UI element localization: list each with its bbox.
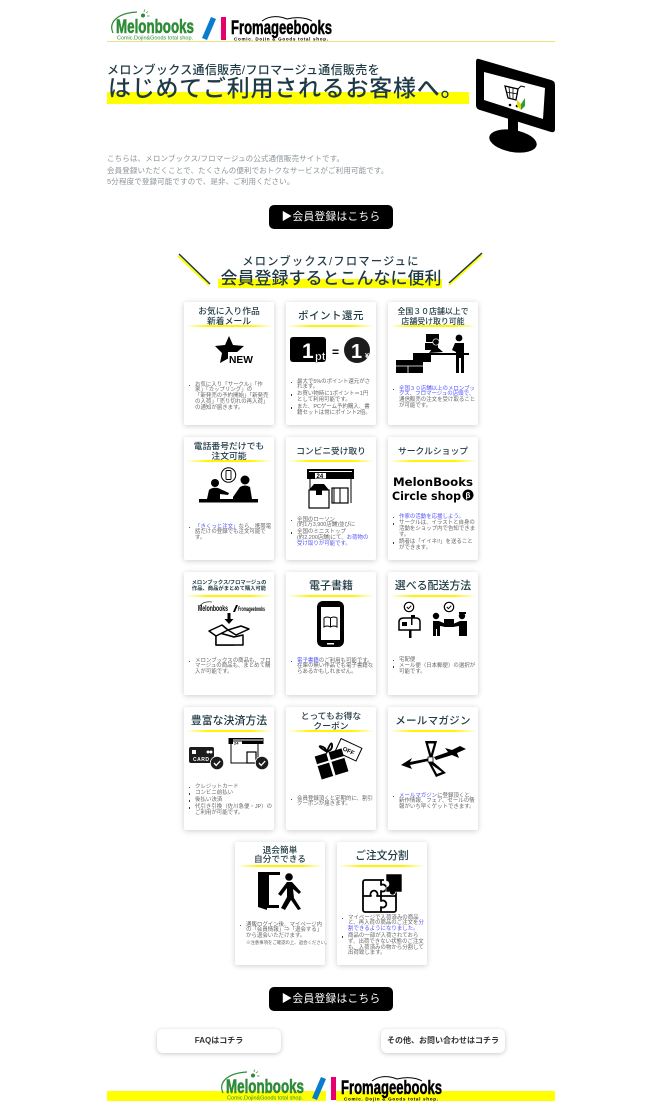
card title	[301, 711, 361, 730]
card text: また、PCゲーム予約購入、書	[297, 404, 370, 410]
main title: はじめてご利用されるお客様へ。	[108, 75, 464, 101]
card text: 可能です。	[399, 669, 426, 675]
icon: mailbox and courier	[398, 602, 467, 638]
card text: 読者は「イイネ!!」を送ること	[399, 539, 473, 545]
card text: (約1万3,900店舗)並びに	[297, 522, 355, 528]
card title	[254, 845, 306, 864]
card text: 代引き引換（佐川急便・JP）の	[195, 804, 272, 810]
icon: bundle box: Melonbooks	[198, 603, 228, 613]
link button: contact: その他、お問い合わせはコチラ	[387, 1036, 499, 1045]
icon: 1pt equals 1 yen: 1	[302, 340, 314, 363]
card text: 作家の活動を応援しよう。	[399, 514, 464, 520]
card text: 通販ログイン後、マイページ内	[246, 922, 322, 928]
card: easy withdrawal	[235, 842, 325, 965]
card title: 作品、商品がまとめて購入可能	[192, 586, 266, 592]
heading line 1: メロンブックス/フロマージュに	[242, 256, 420, 268]
card text	[342, 914, 424, 956]
card text: メール便（日本郵便）の選択が	[399, 663, 475, 669]
logo: Fromageebooks: Fromageebooks	[231, 18, 332, 39]
register button top	[269, 205, 393, 229]
card title: サークルショップ	[398, 446, 468, 456]
icon: convenience store	[307, 469, 354, 509]
icon: puzzle	[362, 874, 402, 913]
card: mail magazine	[388, 707, 478, 830]
card: ebooks	[286, 572, 376, 695]
card text: す。	[399, 532, 409, 538]
card title: メールマガジン	[395, 715, 471, 727]
register button bottom: ▶会員登録はこちら	[282, 993, 380, 1005]
card text: お買い物時に1ポイント＝1円	[297, 391, 368, 397]
card text: 全国のミニストップ	[297, 529, 346, 535]
card title: 電話番号だけでも	[194, 441, 264, 451]
card text: メロンブックスの商品も、フロ	[195, 658, 271, 664]
intro text: 5分程度で登録可能ですので、是非、ご利用ください。	[107, 177, 294, 186]
card: phone order	[184, 437, 274, 560]
card text: 報がいち早くゲットできます。	[399, 804, 475, 810]
card text: 家」「カップリング」の	[195, 387, 252, 393]
card text	[291, 795, 373, 807]
card text: 電子書籍のご利用も可能です。	[297, 658, 373, 664]
footer logos	[217, 1068, 447, 1102]
heading line 2: 会員登録するとこんなに便利	[220, 269, 442, 288]
card text: 籍セットは常にポイント2倍。	[297, 410, 371, 416]
link button: FAQ	[157, 1029, 281, 1053]
card text: (約2,200店舗)にて、お荷物の	[297, 535, 368, 541]
footer logo: Melonbooks: Comic.Dojin&Goods total shop.	[227, 1096, 303, 1102]
logo: Fromageebooks	[231, 17, 332, 42]
card text: お気に入り「サークル」「作	[195, 382, 263, 388]
card text: マイページで入荷済みの商品	[348, 914, 419, 920]
card text: れます。	[297, 384, 318, 390]
footer logo: Fromageebooks: Fromageebooks	[341, 1078, 442, 1099]
card text: メールマガジンに登録頂くと、	[399, 792, 475, 798]
card title: 注文可能	[211, 450, 247, 460]
logo: Melonbooks: Comic.Dojin&Goods total shop.	[117, 36, 193, 42]
card title	[194, 441, 264, 460]
icon: bundle box: Fromageebooks	[238, 606, 265, 613]
card text: の「会員情報」⇒「退会する」	[246, 927, 322, 933]
card title: 新着メール	[207, 316, 251, 326]
card: favorites mail	[184, 302, 274, 425]
icon: 1pt equals 1 yen: 1	[351, 341, 362, 363]
card title: コンビニ受け取り	[296, 446, 366, 456]
card text: 最大で5%のポイント還元がさ	[297, 378, 370, 384]
card text: が可能です。	[399, 403, 431, 409]
card title: 店舗受け取り可能	[401, 316, 465, 326]
card text: 話だけの登録でも注文可能で	[195, 529, 266, 535]
icon: phone order	[199, 467, 258, 502]
card text	[291, 656, 373, 675]
icon: card and store: CARD	[193, 757, 209, 763]
card text: 割できるようになりました。	[348, 926, 419, 932]
card text	[393, 656, 475, 675]
card text: ず、出荷できない状態のご注文	[348, 939, 424, 945]
footer band	[107, 1091, 555, 1101]
icon: circle shop wordmark: MelonBooks	[393, 475, 473, 489]
card text: 活動をショップ内で告知できま	[399, 526, 475, 532]
icon: monitor with cart	[476, 58, 555, 153]
footer logo: Fromageebooks: Comic. Dojin & Goods total shop.	[344, 1096, 438, 1102]
card text: 出荷致します。	[348, 950, 386, 956]
footer logo: Melonbooks: Melonbooks	[226, 1077, 304, 1098]
card text: ご利用が可能です。	[195, 810, 243, 816]
card title: 電子書籍	[309, 580, 353, 592]
card text	[393, 513, 475, 551]
card text: 後払い決済	[195, 797, 222, 803]
card title: 選べる配送方法	[395, 580, 471, 592]
card: circle shop	[388, 437, 478, 560]
icon: weather vane	[401, 741, 466, 777]
icon: circle shop wordmark: β	[466, 491, 471, 500]
card text: らあるかもしれません。	[297, 669, 357, 675]
card text: 全国３０店舗以上のメロンブッ	[399, 386, 475, 392]
icon: door and walking person	[258, 872, 301, 910]
card title: メロンブックス/フロマージュの	[192, 580, 266, 586]
card: split orders	[337, 842, 427, 965]
card text: 在庫の無い作品でも電子書籍な	[297, 663, 373, 669]
logo: Fromageebooks: Comic. Dojin & Goods total shop.	[234, 36, 328, 42]
card: points	[286, 302, 376, 425]
card text: 「きくっと注文」なら、携帯電	[195, 524, 271, 530]
card title: ポイント還元	[298, 310, 364, 322]
card title: とってもお得な	[301, 711, 361, 721]
intro text: 会員登録いただくことで、たくさんの便利でおトクなサービスがご利用可能です。	[107, 166, 388, 175]
card text	[189, 523, 271, 541]
card text: マージュの商品も、まとめて購	[195, 663, 270, 669]
icon: bundle box	[198, 602, 265, 646]
card text: 商品の一部が入荷されておら	[348, 933, 418, 939]
register button bottom	[269, 987, 393, 1011]
card text	[189, 381, 268, 411]
card: delivery methods	[388, 572, 478, 695]
icon: card and store: 24	[234, 740, 239, 746]
card text: 会員登録頂くと定期的に、割引	[297, 796, 373, 802]
register button top: ▶会員登録はこちら	[282, 211, 380, 223]
card title: 全国３０店舗以上で	[397, 307, 469, 316]
card text: コンビニ前払い	[195, 790, 233, 796]
logo: Melonbooks	[112, 10, 194, 42]
icon: star new: NEW	[229, 354, 253, 366]
card text: クーポンが届きます。	[297, 801, 351, 807]
card text: クス、フロマージュの店頭で、	[399, 391, 474, 397]
icon: 1pt equals 1 yen	[290, 337, 370, 363]
card text	[393, 384, 475, 409]
section heading	[177, 252, 483, 288]
card text: 入が可能です。	[195, 669, 233, 675]
card text	[291, 516, 368, 547]
card text: ができます。	[399, 545, 431, 551]
icon: gift and coupon	[314, 738, 363, 780]
icon: card and store	[189, 738, 268, 770]
card text	[393, 792, 475, 810]
card: bundled purchase	[184, 572, 274, 695]
card: convenience store pickup	[286, 437, 376, 560]
card text: サークルは、イラストと自身の	[399, 520, 475, 526]
card text: の入荷」「売り切れの再入荷」	[195, 399, 268, 405]
card text: として利用可能です。	[297, 397, 351, 403]
card text: から退会いただけます。	[246, 933, 305, 939]
card text: の通知が届きます。	[195, 405, 243, 411]
card title	[198, 306, 260, 326]
card text: 宅配便	[399, 656, 415, 662]
card text	[291, 378, 371, 416]
card text	[240, 921, 329, 945]
title highlight	[107, 92, 469, 104]
card: payment methods	[184, 707, 274, 830]
card text: 全国のローソン	[297, 516, 335, 522]
subtitle: メロンブックス通信販売/フロマージュ通信販売を	[107, 63, 380, 77]
card title: 自分でできる	[254, 854, 306, 864]
card text: クレジットカード	[195, 784, 239, 790]
card title: お気に入り作品	[198, 306, 260, 316]
header logos	[111, 9, 332, 42]
icon: circle shop wordmark: Circle shop	[392, 489, 461, 503]
card title	[192, 579, 266, 592]
card title: クーポン	[313, 720, 349, 730]
icon: 1pt equals 1 yen: ¥	[365, 353, 369, 360]
title block	[107, 63, 469, 104]
heading highlight	[218, 279, 442, 288]
icon: circle shop wordmark	[392, 475, 474, 503]
icon: gift and coupon: OFF	[341, 747, 355, 757]
card: coupons	[286, 707, 376, 830]
card text: 「新発売の予約開始」「新発売	[195, 393, 268, 399]
link button: FAQ: FAQはコチラ	[195, 1036, 243, 1045]
card text: 受け取りが可能です。	[297, 541, 351, 547]
footer logo: Melonbooks	[222, 1070, 304, 1102]
card text	[189, 656, 271, 675]
card: store pickup	[388, 302, 478, 425]
card title: 豊富な決済方法	[191, 715, 267, 727]
footer logo: slash and bar	[312, 1077, 336, 1100]
icon: star new	[215, 336, 253, 366]
card title: 退会簡単	[263, 845, 297, 855]
logo: slash and bar	[202, 17, 226, 40]
link button: contact	[381, 1029, 505, 1053]
icon: store counter	[396, 334, 469, 373]
card text: と、再入荷の商品のご注文を分	[348, 920, 424, 926]
decorative slashes	[177, 252, 483, 286]
intro text: こちらは、メロンブックス/フロマージュの公式通信販売サイトです。	[107, 154, 344, 163]
icon: 1pt equals 1 yen: pt	[315, 351, 326, 363]
card text	[189, 783, 272, 816]
card text: 新作情報、フェア、セールの情	[399, 798, 475, 804]
card title: ご注文分割	[355, 850, 409, 862]
logo: Melonbooks: Melonbooks	[116, 17, 194, 38]
card text: す。	[195, 535, 205, 541]
card text: も、入荷済みの物から分割して	[348, 945, 424, 951]
icon: 1pt equals 1 yen: =	[332, 345, 339, 359]
card text: 通信販売の注文を受け取ること	[399, 397, 475, 403]
card text: ※注意事項をご確認の上、退会ください。	[246, 940, 329, 945]
icon: convenience store: 24	[316, 474, 324, 480]
icon: smartphone	[317, 601, 344, 647]
card title	[397, 307, 469, 326]
footer logo: Fromageebooks	[341, 1077, 442, 1102]
intro text	[107, 154, 388, 186]
